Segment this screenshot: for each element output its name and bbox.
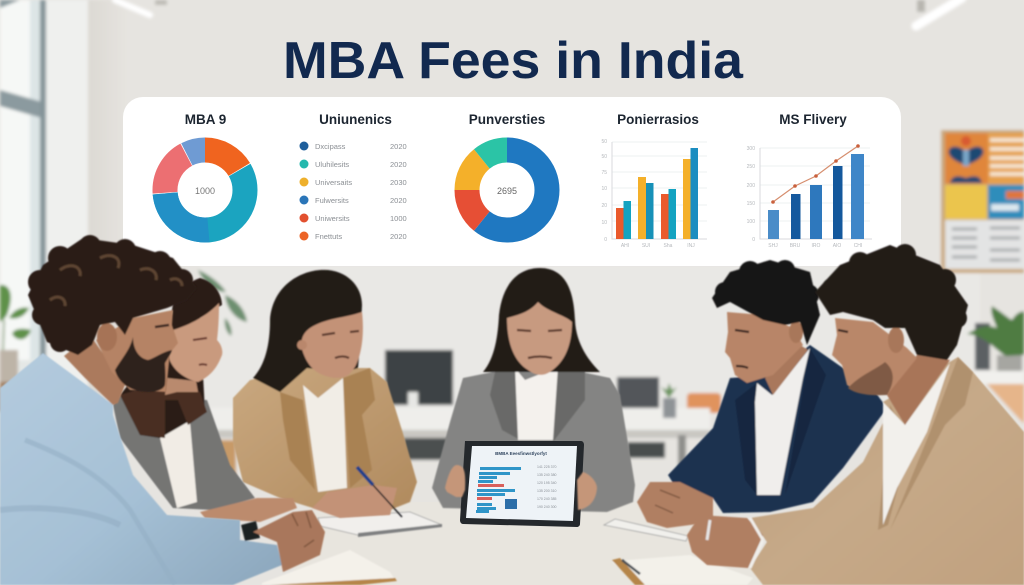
- ceiling lights: [115, 0, 962, 26]
- legend: Uniunenics: 2020: [390, 142, 407, 151]
- chart: Ponierrasios grouped bars: Sha: [664, 243, 673, 249]
- legend: Uniunenics: Fulwersits: [315, 196, 349, 205]
- legend: Uniunenics: [300, 112, 407, 241]
- chart: MS Flivery bars and line: SHJ: [768, 243, 778, 249]
- chart: Ponierrasios grouped bars: 50: [601, 154, 607, 160]
- tablet with report: 170 240 385: [537, 497, 557, 501]
- white blouse: [160, 392, 197, 508]
- writing hand: [312, 485, 397, 518]
- tablet with report: BMBA Eeesfinwstlyorfyt: [495, 451, 547, 456]
- chart: MS Flivery bars and line: 150: [747, 201, 755, 207]
- legend: Uniunenics: Fnettuts: [315, 232, 342, 241]
- face: [302, 312, 363, 378]
- chart: Ponierrasios grouped bars: 10: [601, 220, 607, 226]
- face: [725, 312, 803, 383]
- chart: Punversties donut: 2695: [497, 186, 517, 196]
- white shirt: [883, 363, 950, 525]
- chart: Ponierrasios grouped bars: 50: [601, 139, 607, 145]
- legend: Uniunenics: Dxcipass: [315, 142, 346, 151]
- person: man in tan suit: [687, 244, 1024, 585]
- person: woman in gray blazer at left: [113, 278, 297, 522]
- tablet with report: 135 240 380: [537, 473, 557, 477]
- legend: Uniunenics: 1000: [390, 214, 407, 223]
- watch: [241, 521, 260, 541]
- ear: [789, 321, 803, 343]
- legend: Uniunenics: Uluhilesits: [315, 160, 349, 169]
- legend: Uniunenics: Universaits: [315, 178, 352, 187]
- notepads on table: [262, 512, 753, 585]
- chart: Ponierrasios grouped bars: SUI: [642, 243, 650, 249]
- hair: [120, 278, 222, 438]
- right plant and shelf: [967, 306, 1024, 424]
- chart: MBA donut: 1000: [195, 186, 215, 196]
- hands holding tablet: [445, 465, 597, 510]
- hair: [712, 260, 820, 345]
- conference table: [290, 502, 800, 585]
- tablet with report: 190 240 300: [537, 505, 557, 509]
- person: seated centre woman with gray blazer: [432, 268, 635, 512]
- person: woman in tan blazer: [233, 270, 417, 518]
- blazer: [113, 395, 255, 510]
- chart: Ponierrasios grouped bars: 10: [601, 186, 607, 192]
- chart: Ponierrasios grouped bars: Ponierrasios: [617, 112, 699, 127]
- chart: MS Flivery bars and line: IRO: [812, 243, 821, 249]
- clasped hands: [253, 510, 325, 572]
- neck: [765, 345, 808, 395]
- shirt: [0, 353, 282, 585]
- suit: [668, 345, 887, 513]
- tablet with report: 120 195 340: [537, 481, 557, 485]
- neck: [165, 378, 198, 395]
- face: [96, 310, 178, 392]
- ear: [888, 327, 904, 353]
- chart: MS Flivery bars and line: CHI: [854, 243, 862, 249]
- arm: [200, 498, 297, 522]
- chart: Punversties donut: Punversties: [469, 112, 545, 127]
- legend: Uniunenics: 2020: [390, 196, 407, 205]
- chart: MS Flivery bars and line: [747, 112, 872, 249]
- chart: Ponierrasios grouped bars: INJ: [687, 243, 695, 249]
- left plant: [0, 270, 247, 382]
- tablet with report: 141 225 370: [537, 465, 557, 469]
- chart: MS Flivery bars and line: 200: [747, 183, 755, 189]
- hands: [637, 482, 713, 528]
- chart: Ponierrasios grouped bars: 20: [601, 203, 607, 209]
- chart: Ponierrasios grouped bars: 0: [604, 237, 607, 243]
- face: [507, 302, 572, 375]
- chart: Punversties donut: [467, 112, 547, 230]
- white shirt: [755, 348, 810, 495]
- beard: [115, 337, 172, 392]
- curly hair: [28, 235, 197, 355]
- chart: MS Flivery bars and line: 250: [747, 164, 755, 170]
- neck: [887, 355, 950, 425]
- pen: [357, 467, 373, 485]
- blazer: [233, 368, 417, 510]
- hair: [253, 270, 362, 392]
- neck: [64, 335, 125, 405]
- chart: MS Flivery bars and line: BRU: [790, 243, 801, 249]
- chart: MS Flivery bars and line: 300: [747, 146, 755, 152]
- person: man in blue shirt: [0, 235, 325, 585]
- chart: Ponierrasios grouped bars: AHI: [621, 243, 629, 249]
- window: [0, 0, 46, 412]
- jacket: [750, 357, 1024, 585]
- title: MBA Fees in India: [283, 32, 744, 90]
- legend: Uniunenics: 2020: [390, 232, 407, 241]
- legend: Uniunenics: 2020: [390, 160, 407, 169]
- white blouse: [515, 367, 558, 440]
- person: man in navy suit: [637, 260, 887, 528]
- legend: Uniunenics: Uniwersits: [315, 214, 350, 223]
- background desks and monitors: [205, 350, 721, 480]
- eye: [155, 325, 169, 327]
- chart: MS Flivery bars and line: 100: [747, 219, 755, 225]
- white blouse: [303, 378, 347, 492]
- tablet with report: [460, 441, 584, 527]
- face: [832, 318, 917, 395]
- face: [168, 303, 222, 382]
- white charts panel: [123, 97, 901, 266]
- chart: Ponierrasios grouped bars: [601, 112, 707, 249]
- tablet with report: 135 200 310: [537, 489, 557, 493]
- hair: [483, 268, 600, 372]
- chart: MS Flivery bars and line: AIO: [833, 243, 841, 249]
- chart: MS Flivery bars and line: 0: [752, 237, 755, 243]
- hands: [687, 515, 763, 568]
- chart: MS Flivery bars and line: MS Flivery: [779, 112, 847, 127]
- chart: MBA donut: [165, 112, 245, 230]
- legend: Uniunenics: Uniunenics: [319, 112, 392, 127]
- legend: Uniunenics: 2030: [390, 178, 407, 187]
- wall poster: [941, 130, 1024, 273]
- chart: MBA donut: MBA 9: [185, 112, 226, 127]
- chart: Ponierrasios grouped bars: 75: [601, 170, 607, 176]
- blazer: [432, 367, 635, 512]
- ear: [97, 323, 117, 351]
- curly hair: [815, 244, 968, 360]
